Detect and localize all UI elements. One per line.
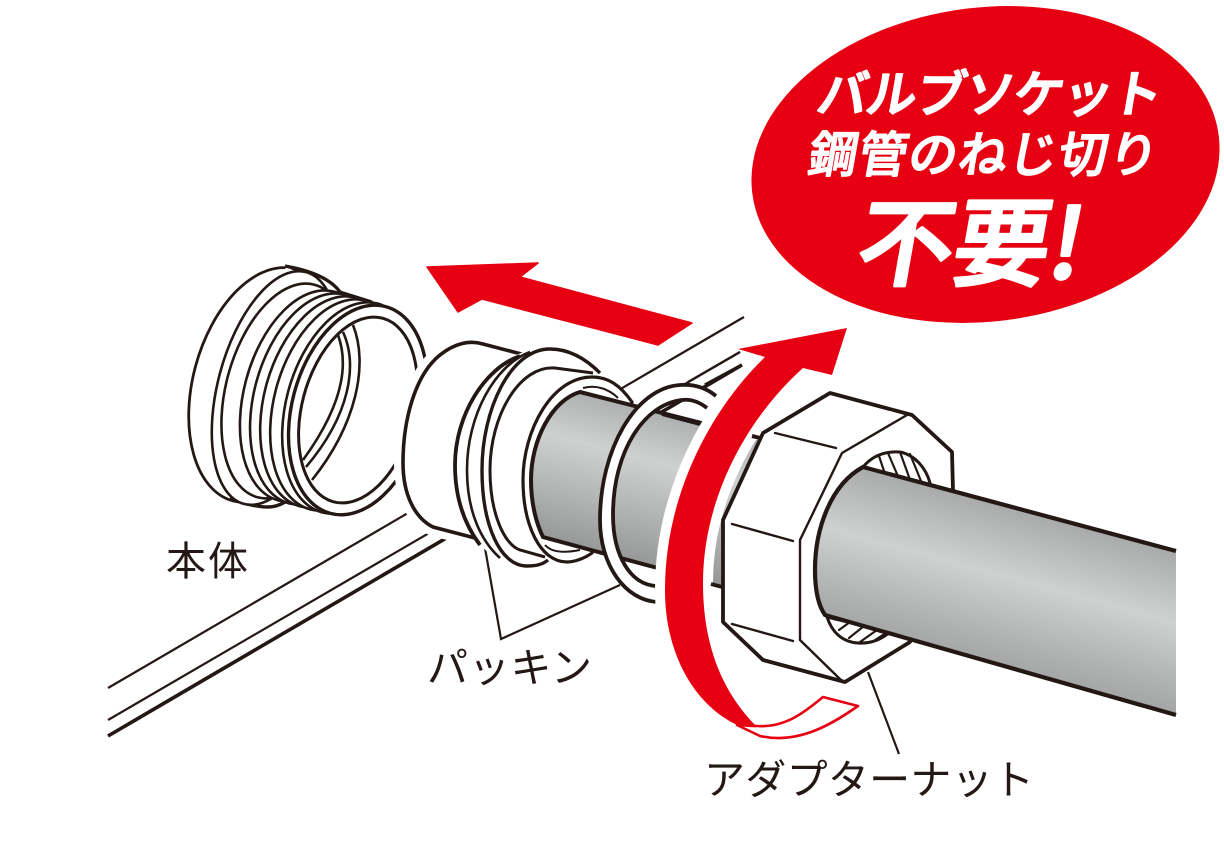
O-ring packing: [600, 385, 716, 602]
leader line: adapter nut: [868, 672, 899, 754]
line 1: バルブソケット: [812, 54, 1169, 127]
nut chamfer: [800, 415, 907, 682]
tail of rotation arrow: [737, 697, 858, 738]
red balloon: [733, 0, 1224, 349]
label: main body: 本体: [166, 529, 248, 587]
nut ridges: [732, 433, 836, 641]
rail tips: [688, 352, 742, 385]
gap pipe edge: [711, 436, 768, 588]
main body fitting: [164, 251, 449, 530]
socket body: [403, 342, 525, 538]
top arrow: [427, 263, 692, 345]
body inner threads: [303, 325, 360, 480]
rotation arrow: [665, 328, 847, 727]
socket rings: [455, 349, 600, 566]
adapter nut: [723, 393, 1176, 715]
label: adapter nut: アダプターナット: [704, 746, 1034, 806]
line 2: 鋼管のねじ切り: [803, 116, 1165, 187]
visible gap pipe behind nut: [695, 425, 775, 590]
background rails: [108, 317, 744, 736]
balloon text: [803, 54, 1169, 306]
pipe through O-ring redraw: [662, 414, 700, 424]
arrow halo: [665, 357, 803, 727]
socket fitting: [403, 342, 632, 566]
leader lines: packing: [485, 548, 620, 639]
label: packing: パッキン: [427, 634, 592, 694]
front pipe: [815, 467, 1176, 715]
threaded hole: [827, 452, 930, 643]
line 3: 不要!: [848, 167, 1098, 306]
rear pipe section: [531, 392, 712, 577]
socket body halo: [403, 342, 525, 538]
